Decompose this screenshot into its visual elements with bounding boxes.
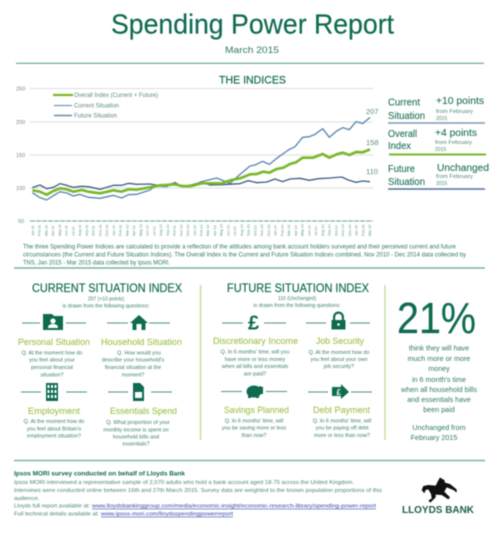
x axis labels: Jan-14 (274, 225, 278, 236)
heading: FUTURE SITUATION INDEX (227, 283, 369, 295)
household situation: financial situation at the (105, 365, 161, 371)
savings planned (222, 405, 289, 439)
methodology text: The three Spending Power Indices are calculated to provide a reflection of the attitudes among bank account holders surveyed and their perceived current and future (23, 244, 456, 250)
x axis labels: Aug-14 (321, 224, 325, 236)
x axis labels: Feb-14 (280, 225, 284, 236)
statistic description (400, 344, 477, 414)
heading: CURRENT SITUATION INDEX (32, 283, 182, 295)
debt payment: Debt Payment (313, 405, 370, 415)
x axis labels: Mar-14 (287, 225, 291, 236)
debt payment: more or less than now? (314, 433, 370, 439)
line chart: indices: 200 (16, 120, 25, 126)
household situation (101, 337, 182, 378)
personal situation: you feel about your (29, 358, 75, 364)
line chart: indices (16, 86, 379, 236)
overall index change: from February (435, 140, 473, 146)
personal situation: situation? (40, 372, 64, 378)
chart legend (53, 93, 158, 120)
line chart: indices: 250 (16, 86, 25, 92)
x axis labels: Mar-12 (125, 225, 129, 236)
debt payment: Q. In 6 months' time, will (313, 418, 371, 424)
savings planned: Q. In 6 months' time, will (225, 418, 283, 424)
icon: black horse (422, 477, 457, 503)
x axis labels: May-11 (58, 224, 62, 236)
discretionary income: have more or less money (225, 357, 286, 363)
x axis labels: Mar-11 (44, 225, 48, 236)
x axis labels: Apr-12 (132, 225, 136, 236)
subheading: is drawn from the following questions: (254, 303, 340, 309)
x axis labels: Jan-15 (354, 225, 358, 236)
household situation: describe your household's (102, 358, 165, 364)
chart end values: 158 (366, 138, 379, 147)
job security: Job Security (316, 336, 364, 346)
discretionary income: when all bills and essentials (221, 364, 289, 370)
x axis labels: Feb-11 (38, 225, 42, 236)
overall index change: 2015 (435, 147, 446, 153)
comparison note: Unchanged from (412, 423, 466, 432)
survey footnote: Lloyds full report available at: (14, 504, 90, 510)
panel: index changes (388, 95, 489, 189)
chart legend: Future Situation (74, 114, 117, 120)
essentials spend: monthly income is spent on (103, 428, 169, 434)
survey footnote (14, 470, 382, 518)
line chart: indices: 50 (18, 219, 24, 225)
logo: lloyds bank (402, 477, 475, 516)
heading: the indices: THE INDICES (219, 74, 286, 86)
job security: you feel about your own (310, 357, 368, 363)
x axis labels: Aug-11 (78, 225, 82, 236)
date: March 2015 (225, 45, 279, 56)
savings planned: Savings Planned (224, 405, 289, 415)
essentials spend (103, 406, 177, 448)
debt payment: you be paying off debt (316, 426, 369, 432)
icon: padlock (306, 312, 370, 330)
discretionary income: are paid? (244, 372, 266, 378)
methodology text (23, 244, 467, 266)
21 percent: 21% (397, 294, 476, 343)
x axis labels: May-12 (139, 224, 143, 236)
survey footnote: www.ipsos-mori.com/lloydsspendingpowerreport (100, 512, 233, 518)
employment (24, 406, 84, 440)
x axis labels: Dec-12 (186, 224, 190, 236)
subheading: 207 (+10 points) (88, 296, 124, 302)
survey footnote: Ipsos MORI survey conducted on behalf of Lloyds Bank (14, 470, 185, 478)
icon: pound sign (222, 312, 286, 334)
job security: job security? (323, 364, 354, 370)
x axis labels: Jul-13 (233, 226, 237, 236)
chart end values: 207 (366, 107, 379, 116)
statistic description: when all household bills (400, 385, 477, 394)
icon: pound arrow: £ (336, 388, 342, 397)
x axis labels: Feb-12 (119, 225, 123, 236)
future situation change: Future (388, 163, 415, 175)
debt payment (313, 405, 371, 439)
subheading (62, 296, 150, 310)
x axis labels: Apr-11 (51, 225, 55, 236)
x axis labels: Nov-11 (98, 225, 102, 236)
panel: headline statistic (397, 294, 477, 442)
x axis labels: May-13 (220, 224, 224, 236)
statistic description: money (428, 364, 450, 373)
x axis labels: Feb-15 (361, 225, 365, 236)
survey footnote: audience. (14, 496, 40, 502)
household situation: moment? (122, 372, 144, 378)
current situation change: Situation (388, 110, 425, 122)
x axis labels: Aug-12 (159, 224, 163, 236)
essentials spend: essentials? (123, 442, 149, 448)
x axis labels: Jul-12 (152, 226, 156, 236)
panel: future situation index (213, 283, 372, 439)
chart legend: Overall Index (Current + Future) (74, 93, 158, 99)
line chart: indices: 150 (16, 153, 25, 159)
discretionary income: Q. In 6 months' time, will you (221, 350, 289, 356)
overall index change: Overall (388, 128, 417, 140)
statistic description: think they will have (409, 344, 469, 353)
x axis labels: Jan-12 (112, 225, 116, 236)
current situation change: Current (388, 96, 420, 108)
subheading: 110 (Unchanged) (278, 296, 316, 302)
icon: pound arrow (308, 384, 372, 399)
x axis labels: Mar-15 (368, 225, 372, 236)
x axis labels: Jun-11 (65, 225, 69, 236)
survey footnote: Interviews were conducted online between 16th and 27th March 2015. Survey data are weighted to the known population proportions of this (14, 488, 382, 494)
icon: house (107, 315, 170, 330)
overall index change: +4 points (435, 127, 477, 139)
personal situation: personal financial (31, 365, 73, 371)
employment: you feel about Britain's (27, 426, 81, 432)
current situation change: +10 points (436, 95, 484, 107)
statistic description: been paid (423, 405, 455, 414)
x axis labels: Mar-13 (206, 225, 210, 236)
x axis labels: Sep-14 (328, 224, 332, 236)
statistic description: in 6 month's time (412, 375, 466, 384)
title: Spending Power Report (111, 8, 394, 40)
x axis labels: Apr-13 (213, 225, 217, 236)
x axis labels (31, 224, 372, 236)
logo: lloyds bank: LLOYDS BANK (402, 505, 475, 516)
statistic description: and essentials have (407, 395, 471, 404)
personal situation: Q. At the moment how do (22, 350, 82, 356)
line chart: indices: 100 (16, 186, 25, 192)
future situation change: from February (436, 174, 474, 180)
future situation change: 2015 (436, 181, 447, 187)
x axis labels: Jan-11 (31, 225, 35, 236)
employment: Q. At the moment how do (24, 419, 84, 425)
current situation change: 2015 (436, 116, 447, 122)
x axis labels: Jun-12 (146, 225, 150, 236)
x axis labels: Feb-13 (200, 225, 204, 236)
x axis labels: Sep-13 (247, 224, 251, 236)
job security (309, 336, 369, 370)
survey footnote: www.lloydsbankinggroup.com/media/economic-insight/economic-research-library/spending-power-report (91, 504, 376, 510)
subheading: is drawn from the following questions: (62, 304, 150, 310)
household situation: Q. How would you (117, 350, 161, 356)
icon: piggy bank (221, 386, 287, 398)
x axis labels: Oct-14 (334, 225, 338, 236)
x axis labels: Sep-11 (85, 225, 89, 236)
x axis labels: Jun-13 (226, 225, 230, 236)
employment: Employment (28, 406, 80, 416)
x axis labels: Jun-14 (307, 225, 311, 236)
x axis labels: Aug-13 (240, 224, 244, 236)
x axis labels: May-14 (301, 224, 305, 236)
icon: bill document (108, 383, 172, 401)
chart end values: 110 (366, 167, 378, 176)
future situation change: Situation (388, 176, 425, 188)
icon: pound sign: £ (248, 312, 259, 334)
methodology text: circumstances (the Current and Future Situation Indices). The Overall Index is the Current and Future Situation Indices combined. Nov 2010 - Dec 2014 data collected by (23, 252, 467, 258)
x axis labels: Sep-12 (166, 224, 170, 236)
savings planned: than now? (242, 433, 266, 439)
statistic description: much more or more (408, 354, 470, 363)
essentials spend: Essentials Spend (110, 406, 177, 416)
household situation: Household Situation (101, 337, 182, 347)
methodology text: TNS, Jan 2015 - Mar 2015 data collected by Ipsos MORI. (23, 260, 170, 266)
personal situation (18, 337, 90, 378)
icon: office building (21, 383, 87, 401)
essentials spend: Q. What proportion of your (106, 420, 170, 426)
x axis labels: Apr-14 (294, 225, 298, 236)
future situation change: Unchanged (437, 162, 489, 174)
discretionary income: Discretionary Income (213, 336, 298, 346)
x axis labels: Dec-13 (267, 224, 271, 236)
personal situation: Personal Situation (18, 337, 90, 347)
discretionary income (213, 336, 298, 378)
overall index change: Index (388, 140, 412, 152)
employment: employment situation? (27, 434, 81, 440)
chart end values (366, 107, 379, 176)
icon: folder person (22, 314, 86, 330)
survey footnote: Ipsos MORI interviewed a representative sample of 2,070 adults who hold a bank account aged 18-75 across the United Kingdom. (14, 480, 354, 486)
x axis labels: Jul-14 (314, 226, 318, 236)
comparison note (411, 423, 466, 442)
overall index change (388, 127, 486, 154)
x axis labels: Dec-14 (348, 224, 352, 236)
x axis labels: Nov-13 (260, 224, 264, 236)
essentials spend: household bills and (113, 434, 159, 440)
current situation change (388, 95, 485, 123)
x axis labels: Oct-13 (253, 225, 257, 236)
x axis labels: Nov-12 (179, 224, 183, 236)
x axis labels: Oct-12 (172, 225, 176, 236)
job security: Q. At the moment how do (309, 350, 369, 356)
future situation change (388, 162, 489, 189)
chart legend: Current Situation (74, 104, 119, 110)
x axis labels: Jul-11 (71, 226, 75, 236)
x axis labels: Oct-11 (92, 225, 96, 236)
x axis labels: Jan-13 (193, 225, 197, 236)
subheading (254, 296, 340, 309)
current situation change: from February (436, 109, 474, 115)
comparison note: February 2015 (411, 433, 457, 442)
x axis labels: Dec-11 (105, 225, 109, 236)
savings planned: you be saving more or less (222, 426, 287, 432)
survey footnote: Full technical details available at: (14, 512, 99, 518)
panel: current situation index (18, 283, 182, 448)
x axis labels: Nov-14 (341, 224, 345, 236)
